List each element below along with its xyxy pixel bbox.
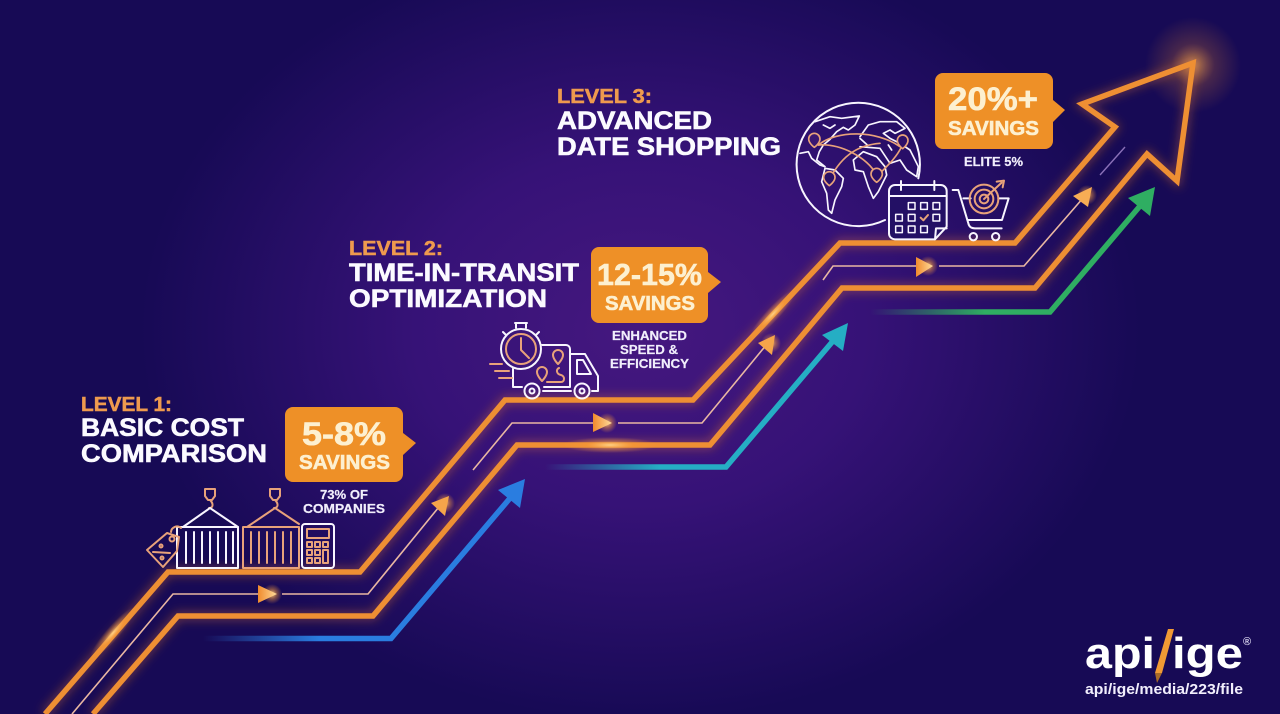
logo: apilige: ® [1243, 636, 1251, 648]
green arrow [870, 187, 1155, 312]
logo: apilige [1085, 629, 1251, 698]
heading: level 1: COMPARISON [81, 440, 267, 468]
savings badge: 12-15%: 12-15% [597, 257, 702, 292]
icon: stopwatch and delivery truck [490, 323, 598, 398]
savings badge: 20%+: SAVINGS [948, 118, 1039, 140]
caption: 73% of companies [303, 488, 385, 516]
savings badge: 20%+: 20%+ [948, 81, 1038, 117]
icon: shopping cart with target [953, 181, 1009, 240]
caption: 73% of companies: COMPANIES [303, 502, 385, 516]
caption: enhanced speed and efficiency: EFFICIENCY [610, 357, 690, 371]
savings badge: 5-8%: 5-8% [302, 416, 386, 452]
panel: level 3 [557, 73, 1065, 240]
heading: level 3: ADVANCED [557, 107, 712, 135]
teal arrow [545, 323, 848, 467]
heading: level 2: LEVEL 2: [349, 238, 443, 260]
logo: apilige: ige [1172, 629, 1243, 678]
savings badge: 20%+ [935, 73, 1065, 149]
heading: level 3 [557, 86, 781, 161]
icon: globe with routes and pins [797, 103, 920, 226]
heading: level 1 [81, 394, 267, 468]
heading: level 3: LEVEL 3: [557, 86, 652, 108]
caption: elite 5%: ELITE 5% [964, 155, 1023, 169]
savings badge: 5-8% [285, 407, 416, 482]
panel: level 1 [81, 394, 416, 568]
savings badge: 5-8%: SAVINGS [299, 452, 390, 474]
heading: level 2: TIME-IN-TRANSIT [349, 259, 579, 287]
blue arrow [203, 479, 525, 638]
heading: level 1: BASIC COST [81, 414, 244, 442]
icon: calendar [889, 181, 947, 239]
icon: cargo containers, price tag and calculator [147, 489, 334, 568]
logo: apilige: api/ige/media/223/file [1085, 681, 1243, 698]
heading: level 1: LEVEL 1: [81, 394, 172, 416]
savings badge: 12-15%: SAVINGS [605, 293, 695, 315]
caption: enhanced speed and efficiency [610, 329, 690, 371]
heading: level 2: OPTIMIZATION [349, 285, 547, 313]
heading: level 2 [349, 238, 579, 313]
caption: 73% of companies: 73% OF [320, 488, 368, 502]
logo: apilige: api [1085, 629, 1155, 678]
caption: enhanced speed and efficiency: SPEED & [620, 343, 678, 357]
heading: level 3: DATE SHOPPING [557, 133, 781, 161]
savings badge: 12-15% [591, 247, 721, 323]
thin route line with arrowheads [72, 147, 1125, 714]
caption: enhanced speed and efficiency: ENHANCED [612, 329, 687, 343]
panel: level 2 [349, 238, 721, 398]
